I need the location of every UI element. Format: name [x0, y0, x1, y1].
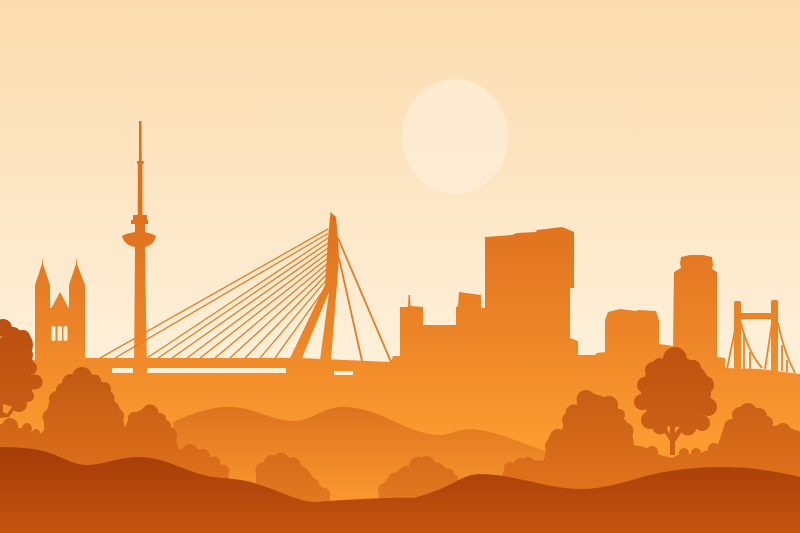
church windows — [52, 326, 68, 341]
cable-stayed bridge pylon — [290, 212, 339, 360]
small suspension bridge — [727, 300, 795, 373]
bush behind front hill, centre right — [378, 456, 458, 505]
left bushes — [0, 367, 230, 520]
city skyline — [0, 121, 800, 533]
sun — [402, 79, 508, 194]
middle hills — [173, 407, 560, 520]
small central bush — [256, 453, 330, 510]
right tree — [634, 347, 717, 455]
front hill — [0, 447, 800, 533]
left tree — [0, 319, 42, 418]
ground and building silhouettes — [0, 227, 800, 533]
deck openings — [112, 368, 133, 373]
bridge stay cables — [100, 229, 391, 362]
right bushes — [500, 390, 800, 510]
observation tower — [122, 121, 156, 375]
